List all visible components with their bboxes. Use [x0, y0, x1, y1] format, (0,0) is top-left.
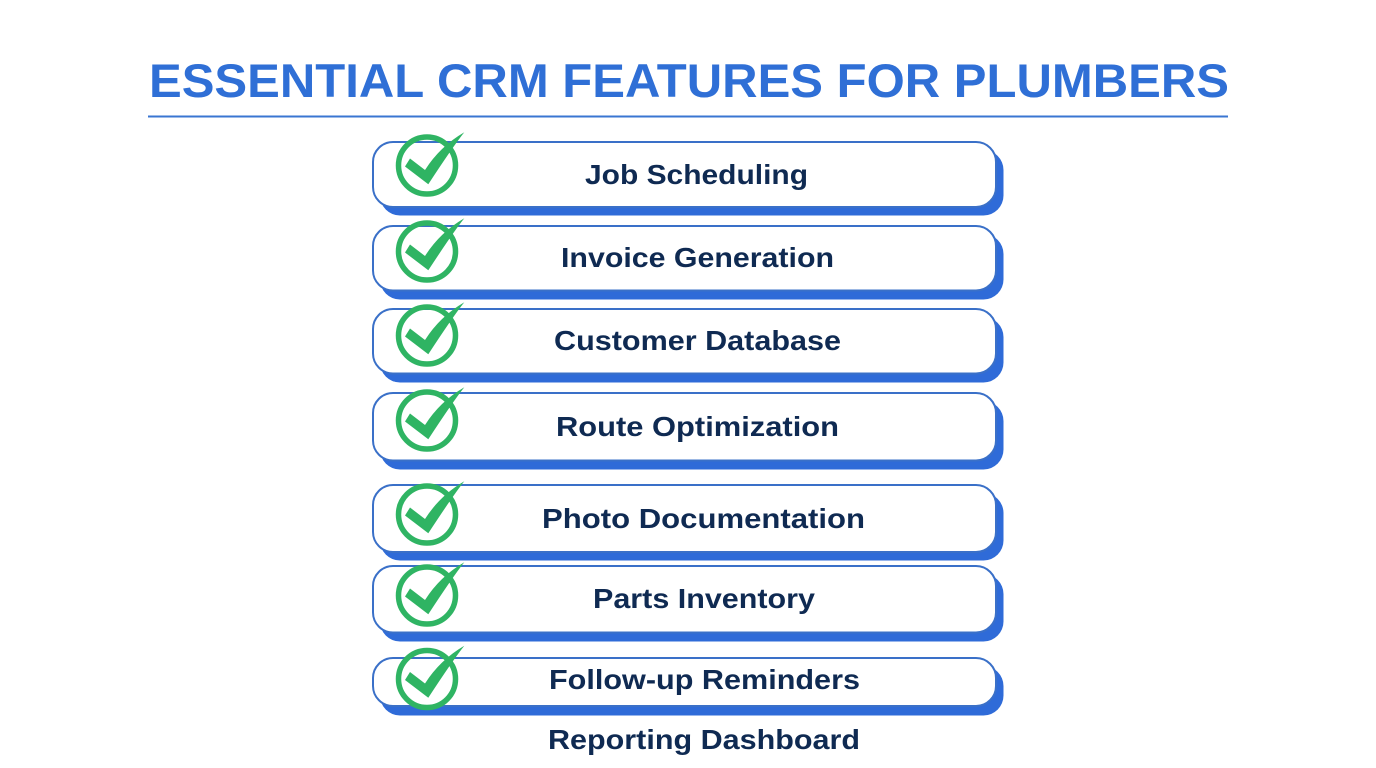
- card: Job Scheduling: [373, 132, 1004, 216]
- card: Parts Inventory: Parts Inventory: [593, 583, 815, 614]
- card: Photo Documentation: Photo Documentation: [542, 503, 865, 534]
- card: Follow-up Reminders: Follow-up Reminders: [549, 664, 860, 695]
- card: Customer Database: [373, 302, 1004, 382]
- card: Invoice Generation: [373, 218, 1004, 300]
- title underline: [148, 116, 1228, 118]
- card: Invoice Generation: Invoice Generation: [561, 242, 834, 273]
- card: Photo Documentation: [373, 481, 1004, 560]
- card: Job Scheduling: Job Scheduling: [585, 159, 808, 190]
- card: Customer Database: Customer Database: [554, 325, 841, 356]
- card: Route Optimization: [373, 387, 1004, 470]
- card: Route Optimization: Route Optimization: [556, 411, 839, 442]
- card: Follow-up Reminders: [373, 646, 1004, 716]
- card: Parts Inventory: [373, 562, 1004, 642]
- title: ESSENTIAL CRM FEATURES FOR PLUMBERS: [149, 54, 1229, 107]
- text: Reporting Dashboard: Reporting Dashboard: [548, 724, 860, 755]
